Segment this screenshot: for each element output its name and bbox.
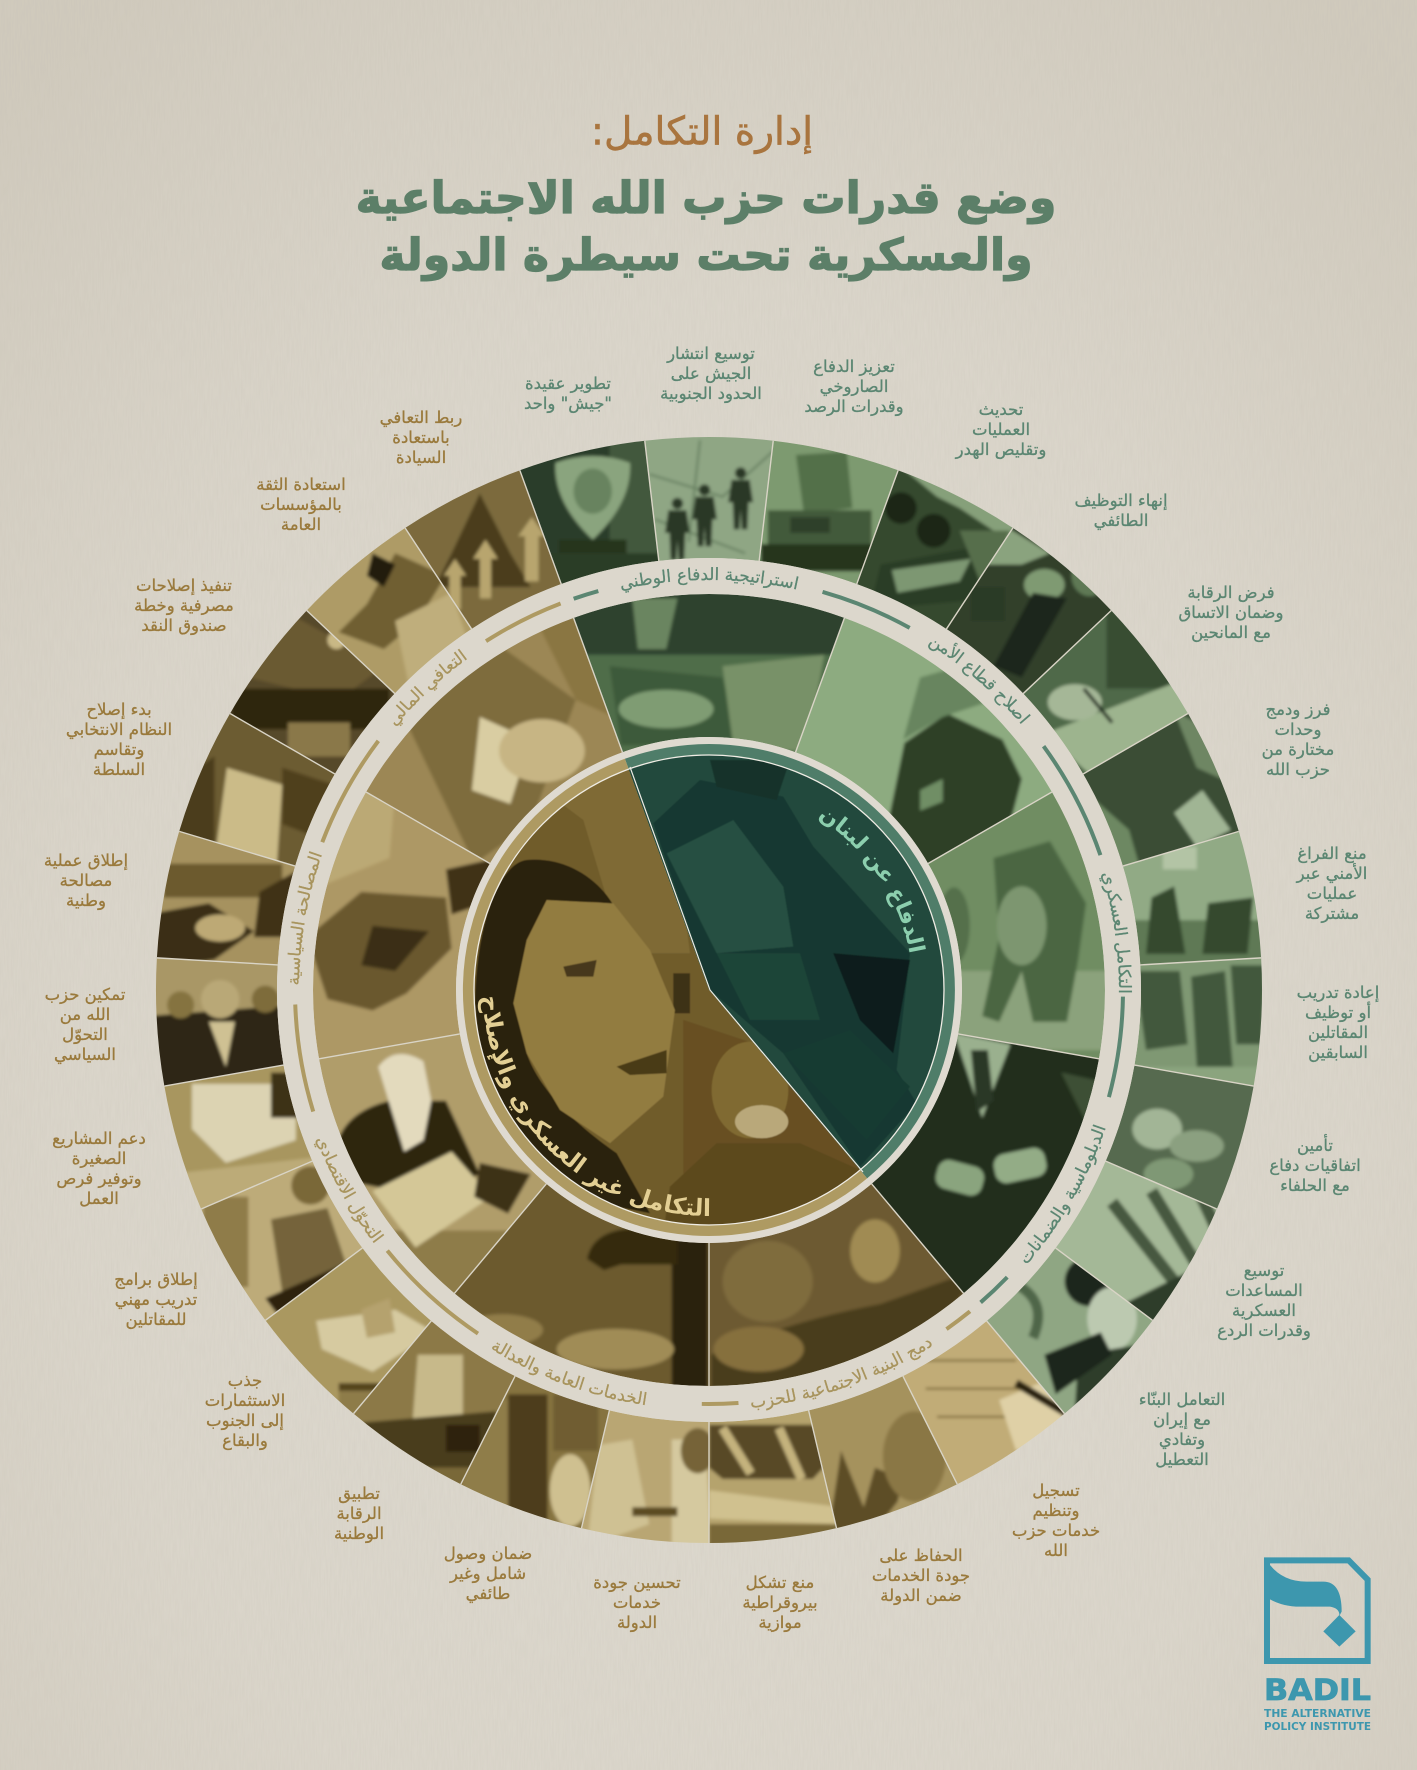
band labels	[278, 565, 1139, 1424]
label 6: وضمان الاتساق	[1178, 603, 1284, 622]
label 17	[444, 1544, 532, 1604]
photo: ok hand	[809, 1376, 958, 1528]
photo: flag and soldiers	[1123, 832, 1262, 965]
label 4: العمليات	[972, 420, 1030, 439]
inner title: defending Lebanon: الدفاع عن لبنان	[818, 813, 926, 952]
photo: hand writing	[1024, 610, 1188, 774]
label 12	[1139, 1390, 1225, 1470]
label 11	[1217, 1261, 1311, 1341]
label 16	[593, 1573, 681, 1633]
label 25: تنفيذ إصلاحات	[136, 576, 232, 595]
label 15: بيروقراطية	[742, 1593, 818, 1612]
label 21: الصغيرة	[72, 1149, 126, 1168]
inner photo: soldier, defending Lebanon	[450, 720, 983, 1253]
band labels: التعافي المالي	[394, 648, 467, 726]
label 9	[1297, 983, 1379, 1063]
photo: office with flag	[354, 1321, 514, 1484]
photo: missiles	[1056, 1162, 1217, 1320]
label 9: المقاتلين	[1308, 1023, 1368, 1042]
label 2: الحدود الجنوبية	[660, 384, 762, 403]
label 22: التحوّل	[62, 1025, 108, 1044]
label 10	[1269, 1136, 1361, 1196]
band labels: المصالحة السياسية	[288, 851, 322, 984]
label 11: توسيع	[1244, 1261, 1284, 1280]
label 8: منع الفراغ	[1297, 844, 1367, 863]
label 17: ضمان وصول	[444, 1544, 532, 1563]
inner circle outline and divider	[474, 755, 944, 1225]
label 12: وتفادي	[1159, 1430, 1205, 1449]
label 4: وتقليص الهدر	[956, 440, 1046, 459]
label 2: توسيع انتشار	[667, 344, 755, 363]
label 6	[1178, 583, 1284, 643]
label 15: منع تشكل	[746, 1573, 814, 1592]
label 11: المساعدات	[1225, 1281, 1303, 1300]
label 25: صندوق النقد	[141, 616, 227, 635]
label 27: السيادة	[396, 448, 446, 467]
inner ring coloured arcs	[463, 744, 955, 1236]
label 1: "جيش" واحد	[524, 394, 612, 413]
inner photo: woman and man, non-military integration	[450, 720, 983, 1253]
label 13	[1012, 1481, 1100, 1561]
label 11: وقدرات الردع	[1217, 1321, 1311, 1340]
label 9: السابقين	[1308, 1043, 1368, 1062]
label 18: تطبيق	[338, 1484, 380, 1503]
band labels: دمج البنية الاجتماعية للحزب	[751, 1340, 932, 1410]
label 20: تدريب مهني	[115, 1290, 197, 1309]
label 7: فرز ودمج	[1265, 700, 1331, 719]
label 13: خدمات حزب	[1012, 1521, 1100, 1540]
label 27: باستعادة	[392, 428, 450, 447]
label 25	[134, 576, 234, 636]
logo: Badil	[1264, 1560, 1371, 1733]
label 7: مختارة من	[1262, 740, 1334, 759]
label 24: السلطة	[93, 760, 145, 779]
label 7	[1262, 700, 1334, 780]
label 23	[44, 851, 128, 911]
label 24: النظام الانتخابي	[66, 720, 172, 739]
label 13: وتنظيم	[1032, 1501, 1080, 1520]
label 19: إلى الجنوب	[206, 1411, 284, 1430]
photo: map and hands	[1106, 1066, 1254, 1209]
label 14	[872, 1546, 970, 1606]
photo: soldier with rifle	[946, 528, 1112, 694]
label 21	[52, 1129, 146, 1209]
logo: Badil: THE ALTERNATIVE	[1264, 1708, 1371, 1720]
label 21: وتوفير فرص	[56, 1169, 142, 1188]
label 22: تمكين حزب	[45, 985, 125, 1004]
band dashes	[124, 405, 1294, 1575]
label 8	[1297, 844, 1367, 924]
label 5: الطائفي	[1094, 511, 1148, 530]
label 26	[256, 475, 346, 535]
label 10: مع الحلفاء	[1280, 1176, 1350, 1195]
photo: training soldiers	[1134, 958, 1262, 1086]
inner title: non-military integration and reform: التكامل غير العسكري والإصلاح	[478, 997, 710, 1216]
label 10: تأمين	[1297, 1136, 1333, 1155]
label 21: دعم المشاريع	[52, 1129, 146, 1148]
photo: doctor and patient	[582, 1410, 708, 1543]
light bands around the rings	[295, 576, 1123, 1404]
label 17: طائفي	[466, 1584, 510, 1603]
label 9: أو توظيف	[1305, 1003, 1371, 1022]
label 14: جودة الخدمات	[872, 1566, 970, 1585]
label 5: إنهاء التوظيف	[1074, 491, 1168, 510]
label 11: العسكرية	[1232, 1301, 1296, 1320]
band labels: الدبلوماسية والضمانات	[1024, 1124, 1106, 1263]
label 16: الدولة	[617, 1613, 657, 1632]
label 17: شامل وغير	[450, 1564, 526, 1583]
label 3: تعزيز الدفاع	[813, 357, 895, 376]
label 24	[66, 700, 172, 780]
label 3	[804, 357, 904, 417]
title: وضع قدرات حزب الله الاجتماعية	[356, 173, 1056, 224]
label 9: إعادة تدريب	[1297, 983, 1379, 1002]
logo: Badil: POLICY INSTITUTE	[1264, 1721, 1371, 1733]
photo: radar vehicle	[760, 440, 898, 584]
label 25: مصرفية وخطة	[134, 596, 234, 615]
label 16: تحسين جودة	[593, 1573, 681, 1592]
label 8: عمليات	[1307, 884, 1357, 903]
label 15	[742, 1573, 818, 1633]
label 23: وطنية	[66, 891, 106, 910]
label 18	[334, 1484, 384, 1544]
label 4: تحديث	[979, 400, 1023, 419]
label 18: الرقابة	[336, 1504, 382, 1523]
label 22	[45, 985, 125, 1065]
photo: books	[710, 1410, 836, 1543]
label 8: الأمني عبر	[1297, 864, 1367, 883]
photo: notebook	[904, 1322, 1064, 1484]
photo: masked soldiers	[857, 470, 1013, 629]
label 16: خدمات	[613, 1593, 661, 1612]
photo: troops marching	[1083, 714, 1239, 866]
label 12: مع إيران	[1153, 1410, 1211, 1429]
label 6: مع المانحين	[1191, 623, 1271, 642]
label 19	[205, 1371, 285, 1451]
label 22: السياسي	[54, 1045, 116, 1064]
photo: soldiers on map	[645, 437, 773, 561]
label 21: العمل	[79, 1189, 119, 1208]
label 13: تسجيل	[1032, 1481, 1080, 1500]
label 2	[660, 344, 762, 404]
label 3: الصاروخي	[820, 377, 888, 396]
label 12: التعطيل	[1155, 1450, 1209, 1469]
label 19: جذب	[228, 1371, 262, 1390]
label 24: وتقاسم	[94, 740, 144, 759]
label 10: اتفاقيات دفاع	[1269, 1156, 1361, 1175]
band labels: الخدمات العامة والعدالة	[492, 1342, 647, 1406]
label 8: مشتركة	[1305, 904, 1359, 923]
label 12: التعامل البنّاء	[1139, 1390, 1225, 1409]
label 24: بدء إصلاح	[86, 700, 152, 719]
band labels: التحوّل الاقتصادي	[314, 1139, 384, 1243]
label 2: الجيش على	[671, 364, 751, 383]
label 7: وحدات	[1275, 720, 1321, 739]
label 20: إطلاق برامج	[114, 1270, 198, 1289]
band labels: التكامل العسكري	[1099, 874, 1132, 992]
label 4	[956, 400, 1046, 460]
label 20	[114, 1270, 198, 1330]
label 27	[380, 408, 462, 468]
label 15: موازية	[758, 1613, 802, 1632]
band labels: اصلاح قطاع الأمن	[928, 641, 1031, 724]
photo: army shield	[520, 440, 658, 584]
label 27: ربط التعافي	[380, 408, 462, 427]
label 26: استعادة الثقة	[256, 475, 346, 494]
label 20: للمقاتلين	[125, 1310, 186, 1329]
logo: Badil: BADIL	[1264, 1673, 1371, 1707]
label 3: وقدرات الرصد	[804, 397, 904, 416]
label 19: الاستثمارات	[205, 1391, 285, 1410]
label 26: العامة	[281, 515, 321, 534]
label 18: الوطنية	[334, 1524, 384, 1543]
title	[356, 170, 1056, 284]
label 14: الحفاظ على	[879, 1546, 963, 1565]
label 23: إطلاق عملية	[44, 851, 128, 870]
label 23: مصالحة	[60, 871, 112, 890]
outer ring separators	[157, 441, 1261, 1543]
label 1	[524, 374, 612, 414]
label 14: ضمن الدولة	[880, 1586, 962, 1605]
title: والعسكرية تحت سيطرة الدولة	[379, 230, 1033, 281]
label 13: الله	[1044, 1541, 1068, 1560]
label 5	[1074, 491, 1168, 531]
label 7: حزب الله	[1266, 760, 1330, 779]
label 19: والبقاع	[222, 1431, 268, 1450]
photo: hand in doorway	[460, 1376, 610, 1528]
label 1: تطوير عقيدة	[525, 374, 611, 393]
label 26: بالمؤسسات	[260, 495, 342, 514]
label 6: فرض الرقابة	[1187, 583, 1275, 602]
photo: Iranian leader	[987, 1248, 1152, 1414]
band labels: استراتيجية الدفاع الوطني	[621, 567, 798, 593]
subtitle: إدارة التكامل:	[591, 110, 813, 154]
label 22: الله من	[60, 1005, 110, 1024]
